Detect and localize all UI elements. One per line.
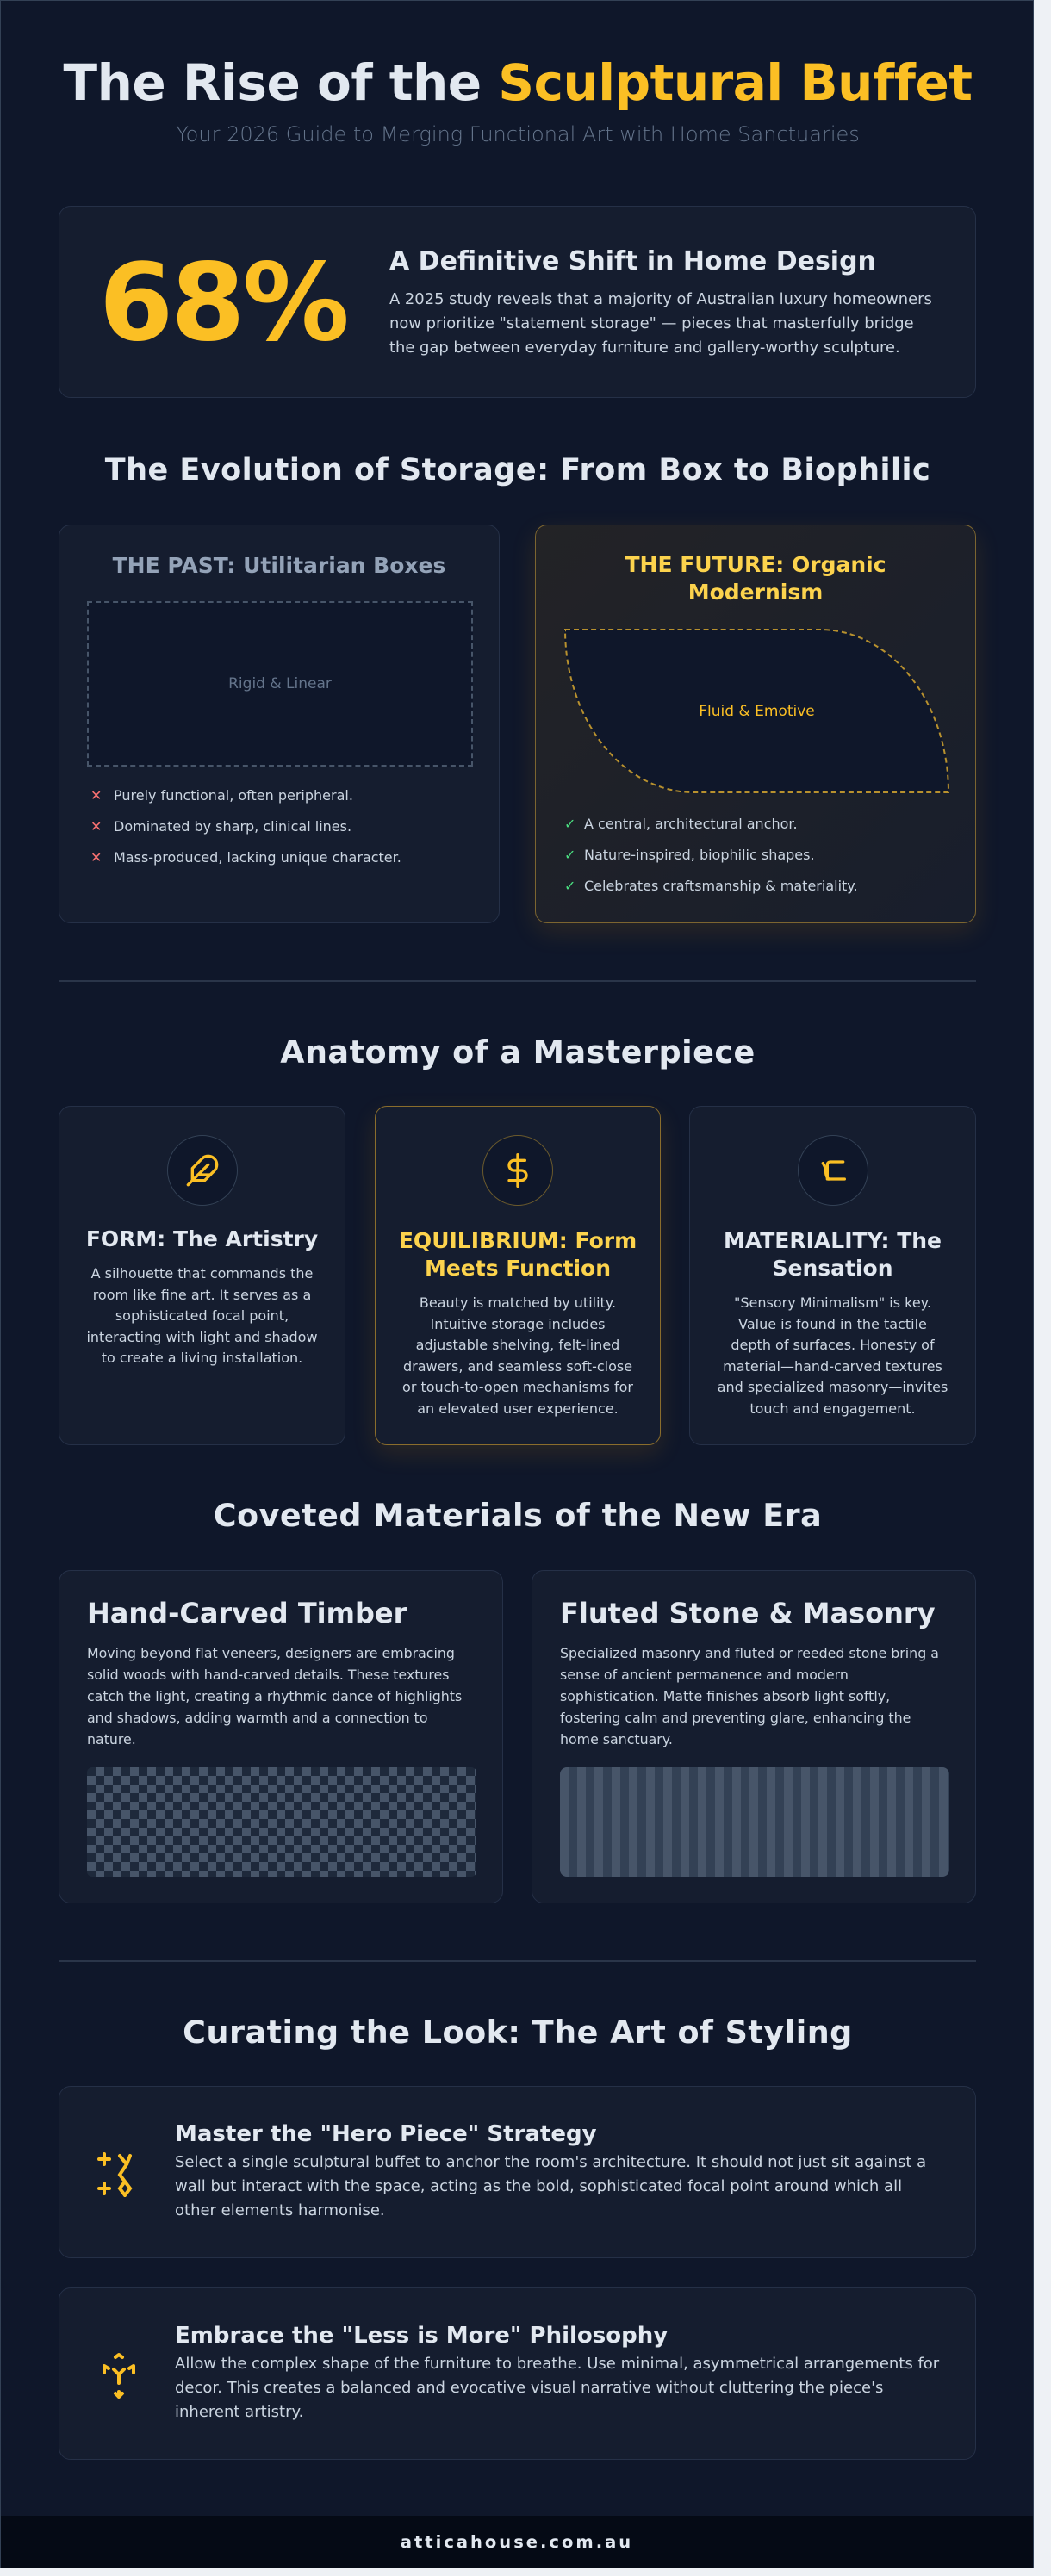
stat number: 68% (99, 241, 347, 365)
rigid box (87, 601, 473, 767)
materiality text: depth of surfaces. Honesty of (731, 1337, 935, 1353)
materiality title (724, 1228, 942, 1281)
subtitle: Your 2026 Guide to Merging Functional Art with Home Sanctuaries (176, 122, 860, 146)
materiality title: Sensation (772, 1256, 892, 1281)
panel: stat (59, 206, 976, 398)
panel: materiality (689, 1106, 976, 1445)
list: past drawbacks: Dominated by sharp, clinical lines. (114, 818, 351, 835)
materiality text: Value is found in the tactile (738, 1316, 927, 1331)
equilibrium text: Beauty is matched by utility. Intuitive storage includes adjustable shelving, felt-lined drawers, and seamless soft-close or touch-to-open mechanisms for an elevated user experience. (402, 1294, 633, 1416)
icon: arrangement (103, 2353, 135, 2399)
texture: flutes (560, 1767, 949, 1877)
list: past drawbacks: Mass-produced, lacking unique character. (114, 849, 401, 866)
list: future benefits: A central, architectural anchor. (584, 816, 798, 832)
heading: materials: Coveted Materials of the New Era (214, 1497, 822, 1534)
materiality text: "Sensory Minimalism" is key. (734, 1294, 931, 1311)
icon: feather (167, 1135, 238, 1206)
panel: future (535, 525, 976, 923)
fluid shape (564, 629, 949, 793)
materiality text: and specialized masonry—invites (718, 1379, 948, 1395)
heading: styling: Curating the Look: The Art of Styling (183, 2014, 853, 2051)
future title: THE FUTURE: Organic (625, 552, 886, 577)
panel: less is more (59, 2287, 976, 2460)
panel: form (59, 1106, 345, 1445)
panel: hero piece (59, 2086, 976, 2258)
form title: FORM: The Artistry (86, 1226, 318, 1251)
hero text: Select a single sculptural buffet to anchor the room's architecture. It should not just sit against a wall but interact with the space, acting as the bold, sophisticated focal point around which all other elements harmonise. (175, 2153, 926, 2219)
list: future benefits: Celebrates craftsmanship & materiality. (584, 878, 858, 894)
equilibrium title: Meets Function (425, 1256, 611, 1281)
heading: evolution: The Evolution of Storage: From Box to Biophilic (105, 453, 930, 487)
panel: past (59, 525, 500, 923)
future title (625, 552, 886, 605)
list: past drawbacks: ✕ (90, 849, 102, 866)
materiality text: touch and engagement. (749, 1400, 916, 1416)
icon: dollar (482, 1135, 553, 1206)
panel: timber (59, 1570, 503, 1903)
timber text: Moving beyond flat veneers, designers are embracing solid woods with hand-carved details. These textures catch the light, creating a rhythmic dance of highlights and shadows, adding warmth and a connection to nature. (87, 1645, 462, 1747)
texture: checker (87, 1767, 476, 1877)
list: future benefits: ✓ (564, 878, 575, 894)
icon: texture (798, 1135, 868, 1206)
footer: atticahouse.com.au (401, 2532, 633, 2552)
equilibrium title: EQUILIBRIUM: Form (399, 1228, 637, 1253)
panel: stone (532, 1570, 976, 1903)
form text: A silhouette that commands the room like fine art. It serves as a sophisticated focal point, interacting with light and shadow to create a living installation. (86, 1265, 318, 1366)
list: past drawbacks: ✕ (90, 818, 102, 835)
list: future benefits: ✓ (564, 847, 575, 863)
future title: Modernism (688, 580, 823, 605)
list: past drawbacks (90, 787, 401, 866)
equilibrium title (399, 1228, 637, 1281)
list: past drawbacks: ✕ (90, 787, 102, 804)
hero title: Master the "Hero Piece" Strategy (175, 2121, 597, 2147)
materiality text: material—hand-carved textures (723, 1357, 942, 1375)
less title: Embrace the "Less is More" Philosophy (175, 2323, 668, 2349)
stone text: Specialized masonry and fluted or reeded stone bring a sense of ancient permanence and modern sophistication. Matte finishes absorb light softly, fostering calm and preventing glare, enhancing the home sanctuary. (560, 1645, 939, 1747)
past title: THE PAST: Utilitarian Boxes (113, 553, 445, 578)
footer (1, 2516, 1033, 2568)
less text: Allow the complex shape of the furniture to breathe. Use minimal, asymmetrical arrangements for decor. This creates a balanced and evocative visual narrative without cluttering the piece's inherent artistry. (175, 2355, 939, 2421)
timber title: Hand-Carved Timber (87, 1597, 407, 1629)
fluid shape: Fluid & Emotive (699, 703, 815, 720)
materiality text (718, 1294, 948, 1416)
stat text: A 2025 study reveals that a majority of Australian luxury homeowners now prioritize "statement storage" — pieces that masterfully bridge the gap between everyday furniture and gallery-worthy sculpture. (389, 290, 932, 357)
list: future benefits: ✓ (564, 816, 575, 832)
stat heading: A Definitive Shift in Home Design (389, 246, 876, 276)
icon: sparkle (97, 2152, 133, 2197)
panel: equilibrium (375, 1106, 661, 1445)
rigid box: Rigid & Linear (228, 675, 332, 692)
title: The Rise of the Sculptural Buffet (64, 53, 972, 112)
heading: anatomy: Anatomy of a Masterpiece (280, 1034, 756, 1071)
materiality title: MATERIALITY: The (724, 1228, 942, 1253)
list: future benefits: Nature-inspired, biophilic shapes. (584, 847, 815, 863)
stone title: Fluted Stone & Masonry (560, 1597, 936, 1629)
list: past drawbacks: Purely functional, often peripheral. (114, 787, 353, 804)
list: future benefits (564, 816, 858, 894)
